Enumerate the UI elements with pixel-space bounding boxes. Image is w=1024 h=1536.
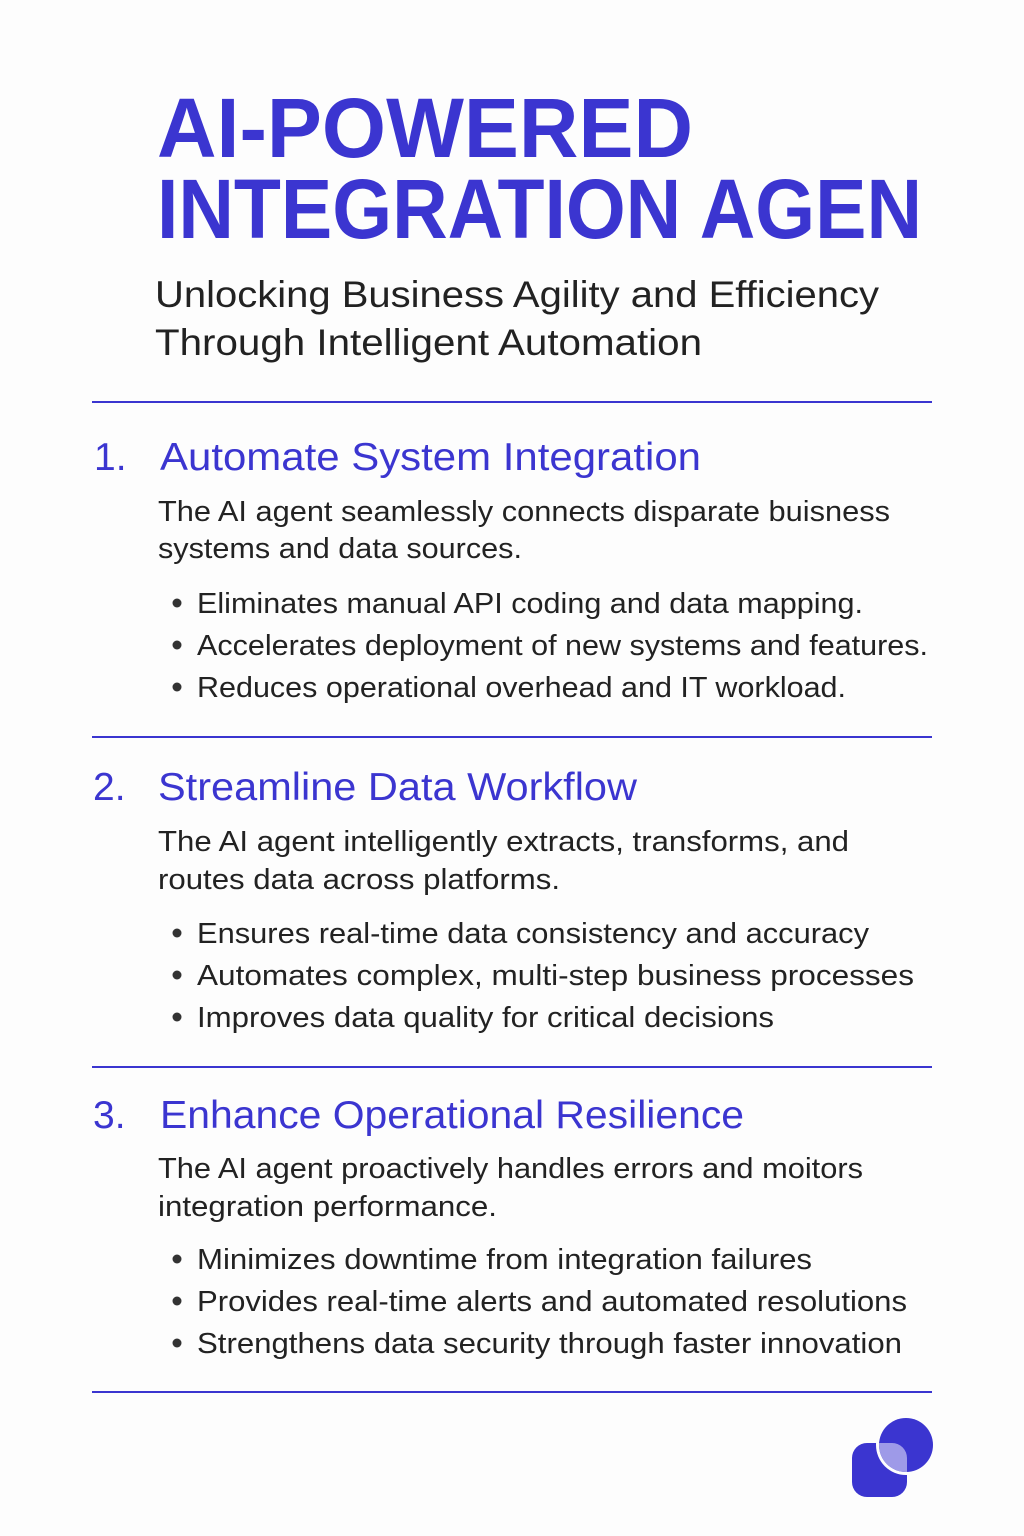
heading 3: 3. — [93, 1094, 126, 1137]
bullets 3: Provides real-time alerts and automated resolutions — [197, 1286, 907, 1318]
description 3: integration performance. — [158, 1191, 497, 1223]
bullets 3: Strengthens data security through faster innovation — [197, 1328, 902, 1360]
section 2: streamline data workflow — [93, 766, 914, 1034]
bullets 1: Eliminates manual API coding and data mapping. — [197, 588, 863, 620]
bullets 1: Accelerates deployment of new systems and features. — [197, 630, 928, 662]
title: AI-POWERED — [157, 81, 693, 175]
bullets 3: Minimizes downtime from integration failures — [197, 1244, 812, 1276]
description 1 — [158, 496, 890, 565]
heading 1: 1. — [94, 436, 127, 479]
heading 1: Automate System Integration — [160, 436, 701, 479]
description 1: The AI agent seamlessly connects disparate buisness — [158, 496, 890, 528]
description 2: The AI agent intelligently extracts, transforms, and — [158, 826, 849, 858]
bullets 2: Automates complex, multi-step business processes — [197, 960, 914, 992]
bullets 1: Reduces operational overhead and IT workload. — [197, 672, 846, 704]
description 1: systems and data sources. — [158, 533, 522, 565]
subtitle — [155, 274, 880, 363]
bullets 1 — [172, 588, 928, 704]
heading 3: Enhance Operational Resilience — [160, 1094, 744, 1137]
bullets 2 — [172, 918, 914, 1034]
description 3: The AI agent proactively handles errors and moitors — [158, 1153, 863, 1185]
section 1: automate system integration — [94, 436, 928, 704]
bullets 2: Improves data quality for critical decisions — [197, 1002, 774, 1034]
subtitle: Through Intelligent Automation — [155, 322, 702, 363]
bullets 3 — [172, 1244, 907, 1360]
description 2 — [158, 826, 849, 896]
title — [157, 81, 922, 256]
subtitle: Unlocking Business Agility and Efficiency — [155, 274, 880, 315]
section 3: enhance operational resilience — [93, 1094, 907, 1360]
heading 2: Streamline Data Workflow — [158, 766, 638, 809]
icon: logo — [852, 1415, 936, 1497]
description 2: routes data across platforms. — [158, 864, 560, 896]
bullets 2: Ensures real-time data consistency and accuracy — [197, 918, 870, 950]
title: INTEGRATION AGEN — [157, 162, 922, 256]
description 3 — [158, 1153, 863, 1223]
heading 2: 2. — [93, 766, 126, 809]
